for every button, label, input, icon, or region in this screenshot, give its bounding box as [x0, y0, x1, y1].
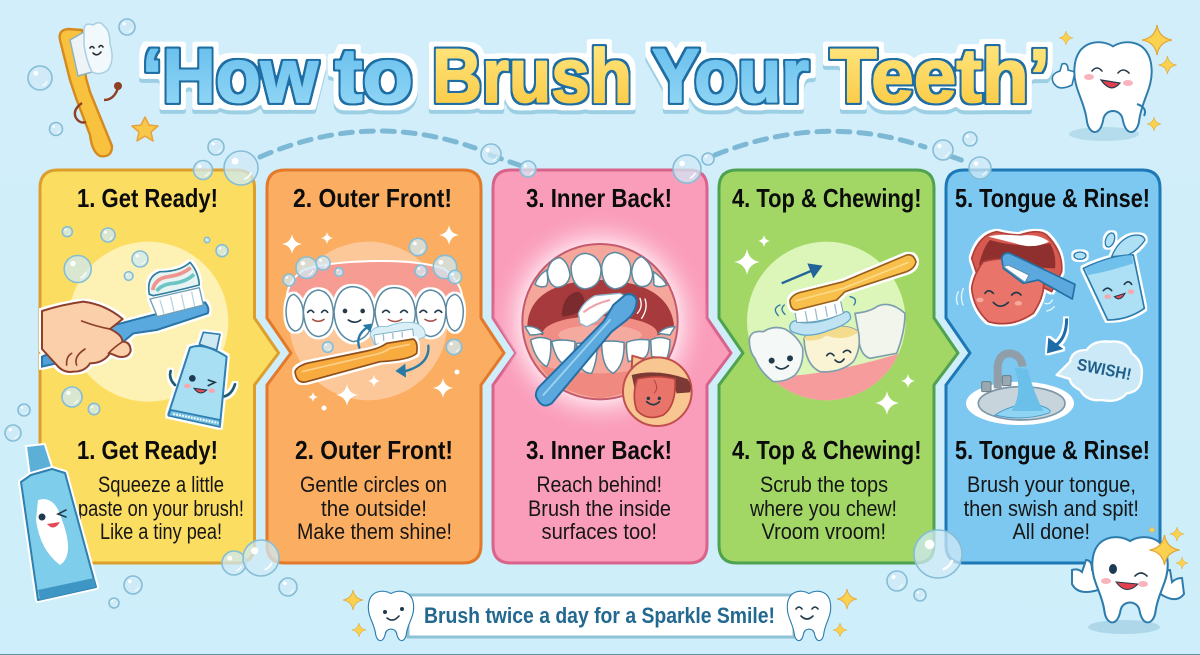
icon: small toothpaste tube: [168, 332, 235, 427]
icon: water cup: [1074, 232, 1145, 320]
body text: step 1: [77, 435, 244, 544]
panel: step 3 inner back: [488, 170, 731, 563]
heading: step 1: 1. Get Ready!: [77, 183, 218, 213]
body text: step 1: paste on your brush!: [78, 496, 244, 521]
body text: step 3: Brush the inside: [528, 496, 671, 521]
icon: footer left tooth: [368, 591, 414, 641]
connector arc: step 1 to 3: [260, 131, 522, 166]
icon: top right tooth mascot: [1052, 42, 1152, 141]
icon: star: [132, 117, 158, 141]
body text: step 5: All done!: [1012, 519, 1090, 544]
body text: step 1: Squeeze a little: [98, 472, 224, 497]
title: Brush: [432, 34, 632, 119]
illustration: tongue and brush: [956, 232, 1075, 324]
body text: step 3: Reach behind!: [536, 472, 662, 497]
title: Your: [652, 34, 809, 119]
heading: step 1 repeated: 1. Get Ready!: [77, 435, 218, 465]
body text: step 3: [526, 435, 672, 544]
heading: step 3: 3. Inner Back!: [526, 183, 672, 213]
body text: step 2: the outside!: [321, 496, 427, 521]
title: [142, 34, 1050, 119]
panel: step 5 tongue and rinse: [946, 170, 1160, 563]
sparkles: footer: [343, 589, 857, 637]
sparkles: top right: [1059, 25, 1176, 131]
body text: step 5: then swish and spit!: [964, 496, 1139, 521]
footer text: Brush twice a day for a Sparkle Smile!: [424, 603, 775, 628]
sparkles inside panels: [282, 225, 915, 415]
heading: step 2 repeated: 2. Outer Front!: [295, 435, 453, 465]
body text: step 4: Scrub the tops: [760, 472, 888, 497]
body text: step 4: Vroom vroom!: [762, 519, 886, 544]
body text: step 2: Gentle circles on: [300, 472, 447, 497]
illustration: open mouth with blue brush: [522, 244, 678, 406]
body text: step 4: [732, 435, 922, 544]
footer banner: [408, 595, 794, 637]
title: Teeth’: [830, 34, 1050, 119]
icon: tongue callout: [623, 356, 692, 426]
heading: step 5 repeated: 5. Tongue & Rinse!: [955, 435, 1150, 465]
body text: step 1: Like a tiny pea!: [100, 519, 222, 544]
icon: toothbrush mascot: [60, 23, 122, 156]
bottom edge line: [0, 654, 1200, 655]
body text: step 5: [955, 435, 1150, 544]
title: ‘How: [142, 34, 319, 119]
body text: step 3: surfaces too!: [542, 519, 657, 544]
icon: footer right tooth: [787, 591, 831, 641]
illustration: outer front teeth and brush: [286, 242, 463, 400]
callout: swish: [1057, 341, 1142, 401]
glow behind mouth: [493, 222, 708, 422]
heading: step 3 repeated: 3. Inner Back!: [526, 435, 672, 465]
icon: sink and faucet: [966, 353, 1074, 425]
connector arc: step 3 to 5: [715, 131, 967, 162]
body text: step 2: [295, 435, 453, 544]
heading: step 4 repeated: 4. Top & Chewing!: [732, 435, 922, 465]
icon: big toothpaste tube: [21, 445, 96, 600]
illustration: molars and brush: [747, 242, 917, 405]
heading: step 2: 2. Outer Front!: [293, 183, 452, 213]
panel: step 2 outer front: [267, 170, 504, 563]
heading: step 5: 5. Tongue & Rinse!: [955, 183, 1150, 213]
sparkles: bottom right: [1148, 526, 1188, 569]
panel: step 1 get ready: [40, 170, 279, 563]
callout: swish: SWISH!: [1075, 355, 1133, 384]
arrow: to sink: [1047, 318, 1067, 353]
title: to: [335, 34, 413, 119]
body text: step 2: Make them shine!: [297, 519, 452, 544]
bubbles: [5, 19, 991, 608]
body text: step 4: where you chew!: [749, 496, 897, 521]
icon: bottom right tooth mascot: [1072, 537, 1184, 634]
illustration: hand with toothbrush and paste: [42, 242, 228, 402]
panel: step 4 top and chewing: [719, 170, 958, 563]
heading: step 4: 4. Top & Chewing!: [732, 183, 922, 213]
body text: step 5: Brush your tongue,: [967, 472, 1136, 497]
